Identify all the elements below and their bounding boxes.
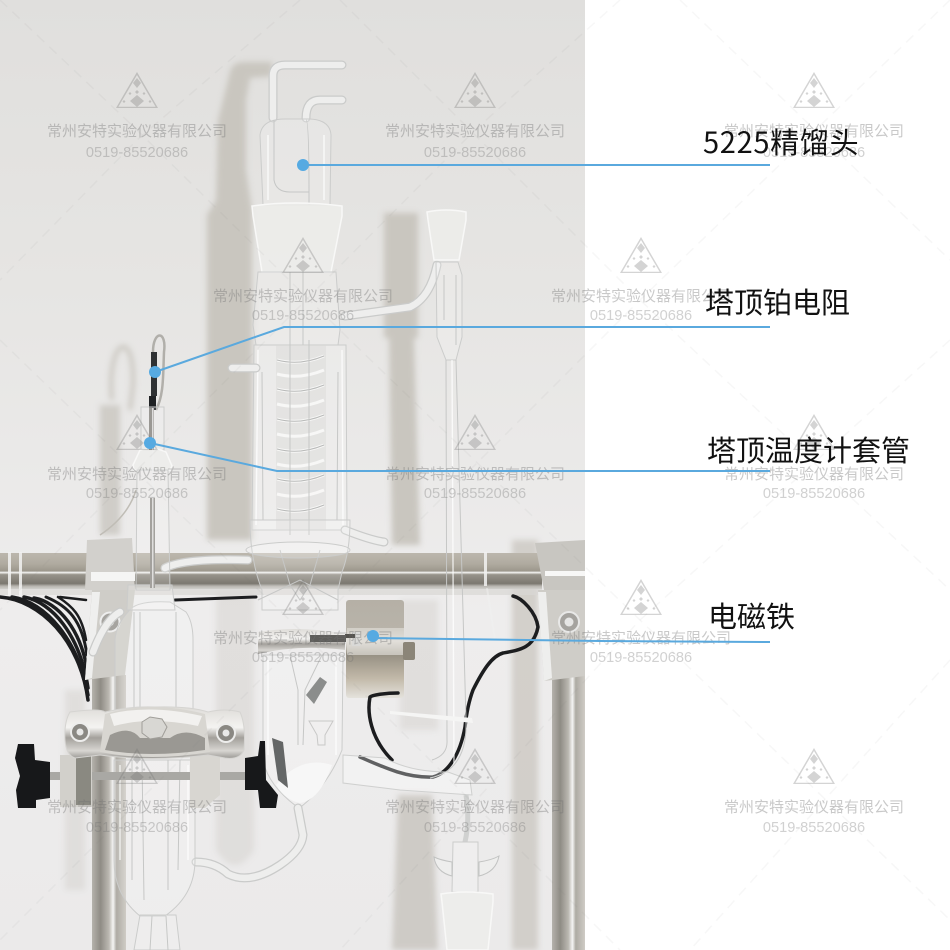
watermark text: 常州安特实验仪器有限公司 (724, 123, 904, 140)
watermark text: 常州安特实验仪器有限公司 (47, 123, 227, 140)
glass: distillation head (252, 65, 342, 345)
vertical post right (552, 675, 585, 950)
bracket right (535, 540, 585, 681)
watermark text: 0519-85520686 (86, 820, 188, 836)
bracket left (85, 538, 135, 680)
callout: 5225精馏头: 5225精馏头 (703, 120, 859, 162)
photo background (0, 0, 585, 950)
glass: main column with clamp and lower vessel (246, 520, 350, 806)
knob right (245, 741, 278, 808)
callout: 5225精馏头 (297, 120, 859, 171)
watermark text (47, 123, 904, 836)
glass: condenser with spiral coil (232, 340, 384, 542)
electromagnet (333, 600, 415, 698)
glass: overflow tube from column to lower vessel (196, 808, 303, 878)
callout: 电磁铁 (367, 594, 795, 642)
watermark text: 常州安特实验仪器有限公司 (385, 466, 565, 483)
vertical post left (92, 675, 126, 950)
watermark text: 常州安特实验仪器有限公司 (724, 799, 904, 816)
watermark text: 0519-85520686 (252, 308, 354, 324)
watermark text: 常州安特实验仪器有限公司 (551, 630, 731, 647)
watermark text: 0519-85520686 (763, 486, 865, 502)
rod and knobs (48, 755, 248, 808)
callout: 塔顶铂电阻: 塔顶铂电阻 (705, 280, 850, 322)
watermark text: 0519-85520686 (763, 820, 865, 836)
watermark text: 0519-85520686 (590, 650, 692, 666)
watermark logos (116, 72, 835, 784)
watermark text: 常州安特实验仪器有限公司 (724, 466, 904, 483)
watermark text: 0519-85520686 (590, 308, 692, 324)
condenser side nub (232, 364, 256, 372)
metal collar band (258, 629, 346, 654)
knob left (15, 744, 50, 808)
watermark text: 0519-85520686 (424, 145, 526, 161)
watermark text: 常州安特实验仪器有限公司 (551, 288, 731, 305)
watermark text: 0519-85520686 (424, 820, 526, 836)
callout: 塔顶温度计套管: 塔顶温度计套管 (707, 428, 910, 470)
cable ties on bar (8, 552, 496, 640)
glass: thermometer side vessel (93, 560, 248, 950)
glass: side arm and receiver tube (345, 210, 466, 778)
tie on tube (390, 711, 473, 723)
watermark text: 0519-85520686 (86, 145, 188, 161)
watermark text: 常州安特实验仪器有限公司 (213, 288, 393, 305)
black cables left (0, 597, 256, 700)
watermark text: 常州安特实验仪器有限公司 (47, 799, 227, 816)
magnet cable (360, 596, 538, 777)
wall shadows (65, 62, 538, 950)
stainless cross bar (0, 553, 542, 595)
platinum resistance probe (149, 336, 164, 410)
steel clamp (65, 707, 244, 758)
glass: lower tube and drip tip (343, 755, 499, 950)
callout: 塔顶温度计套管 (144, 428, 910, 471)
watermark text: 常州安特实验仪器有限公司 (385, 799, 565, 816)
watermark text: 常州安特实验仪器有限公司 (213, 630, 393, 647)
callout: 塔顶铂电阻 (149, 280, 850, 378)
watermark text: 0519-85520686 (763, 145, 865, 161)
watermark text: 常州安特实验仪器有限公司 (47, 466, 227, 483)
callout: 电磁铁: 电磁铁 (708, 594, 795, 636)
watermark text: 0519-85520686 (252, 650, 354, 666)
thermometer well (100, 407, 172, 590)
watermark text: 常州安特实验仪器有限公司 (385, 123, 565, 140)
watermark text: 0519-85520686 (424, 486, 526, 502)
ground joint (252, 203, 342, 272)
watermark text: 0519-85520686 (86, 486, 188, 502)
